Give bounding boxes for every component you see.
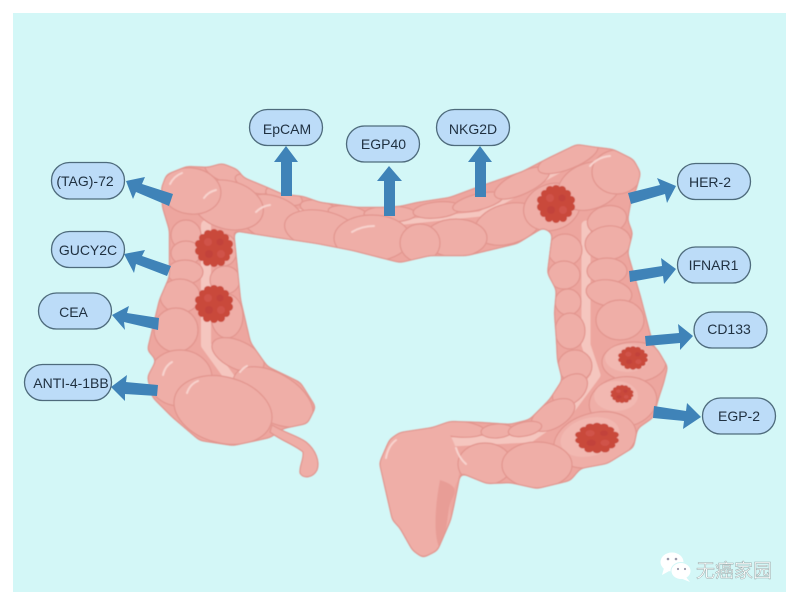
base tone	[149, 148, 666, 514]
label: EGP-2	[702, 398, 776, 434]
descending outer lobes	[586, 205, 627, 231]
tumour: descending upper	[618, 346, 648, 370]
label: EpCAM: EpCAM	[263, 121, 311, 137]
label: CD133	[694, 312, 767, 348]
label: ANTI-4-1BB: ANTI-4-1BB	[33, 375, 109, 391]
transverse back band lobes	[205, 166, 236, 180]
label: GUCY2C	[52, 232, 124, 268]
transverse front lobes	[248, 194, 300, 238]
arrow: to EpCAM	[274, 146, 298, 196]
label: EpCAM	[250, 110, 322, 146]
arrow: to NKG2D	[468, 146, 492, 197]
colon silhouette outline	[148, 145, 667, 557]
appendix	[270, 425, 318, 477]
arrow: to EGP-2	[653, 403, 701, 429]
label: NKG2D	[436, 110, 510, 146]
tumour: ascending lower	[195, 285, 233, 323]
ascending outer lobes	[170, 220, 202, 244]
rectum body	[382, 428, 458, 555]
label: HER-2: HER-2	[689, 174, 731, 190]
descending inner lobes	[548, 234, 582, 266]
label: (TAG)-72	[52, 162, 124, 199]
rectum shading	[436, 480, 455, 548]
label: NKG2D: NKG2D	[449, 121, 497, 137]
label: GUCY2C: GUCY2C	[59, 242, 117, 258]
tumour pocket lobes	[602, 342, 666, 382]
arrow: to EGP40	[377, 166, 402, 216]
label: EGP40: EGP40	[361, 136, 406, 152]
arrow: to (TAG)-72	[126, 177, 173, 206]
arrow: to IFNAR1	[629, 258, 676, 284]
arrow: to CEA	[112, 306, 159, 330]
tumour: descending lower	[575, 423, 619, 453]
label: (TAG)-72: (TAG)-72	[56, 173, 114, 189]
haustra lobes masked to silhouette	[140, 136, 680, 560]
label: CEA: CEA	[59, 304, 89, 320]
ascending inner lobes	[226, 234, 236, 266]
label: ANTI-4-1BB	[24, 364, 112, 400]
label: HER-2	[678, 164, 750, 200]
tumour: hepatic flexure upper	[195, 229, 233, 267]
tumour: splenic flexure	[537, 185, 575, 223]
label: EGP-2: EGP-2	[718, 408, 760, 424]
label: EGP40	[346, 126, 420, 162]
arrow: to GUCY2C	[124, 250, 171, 276]
arrow: to HER-2	[628, 178, 676, 204]
tumour: descending middle	[611, 385, 633, 403]
arrow: to ANTI-4-1BB	[111, 375, 158, 401]
label: IFNAR1: IFNAR1	[689, 257, 739, 273]
label: CEA	[38, 293, 112, 329]
longitudinal channels	[298, 172, 560, 225]
sigmoid lobes	[440, 423, 482, 438]
splenic flexure lobes	[523, 182, 579, 231]
colon illustration	[140, 136, 680, 560]
arrow: to CD133	[645, 324, 693, 350]
watermark: WeChat icon and name: 无癌家园	[696, 560, 772, 582]
label: CD133: CD133	[707, 321, 751, 337]
label: IFNAR1	[678, 247, 750, 283]
highlights	[170, 173, 182, 184]
caecum lobes	[148, 350, 212, 406]
watermark: WeChat icon and name	[660, 552, 772, 582]
